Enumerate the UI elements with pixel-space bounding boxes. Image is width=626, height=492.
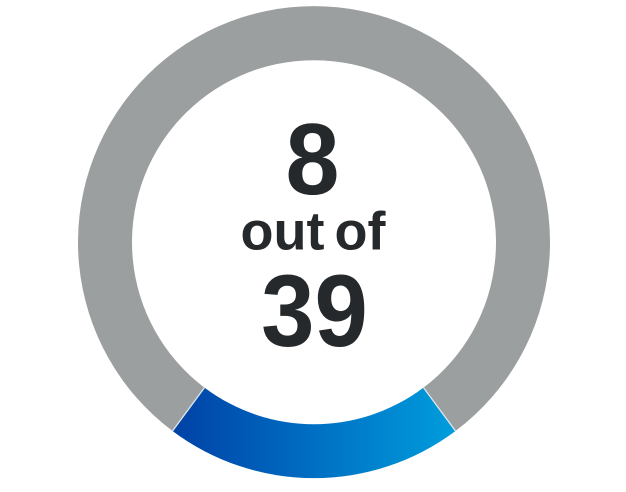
center number: 8: 8 xyxy=(286,102,339,215)
donut: grey remainder segment xyxy=(78,6,550,431)
segment boundary right xyxy=(424,388,456,431)
donut: blue highlighted segment xyxy=(172,388,456,478)
center number: 39: 39 xyxy=(261,253,368,368)
segment boundary left xyxy=(172,388,204,431)
center label: out of: out of xyxy=(241,202,386,262)
